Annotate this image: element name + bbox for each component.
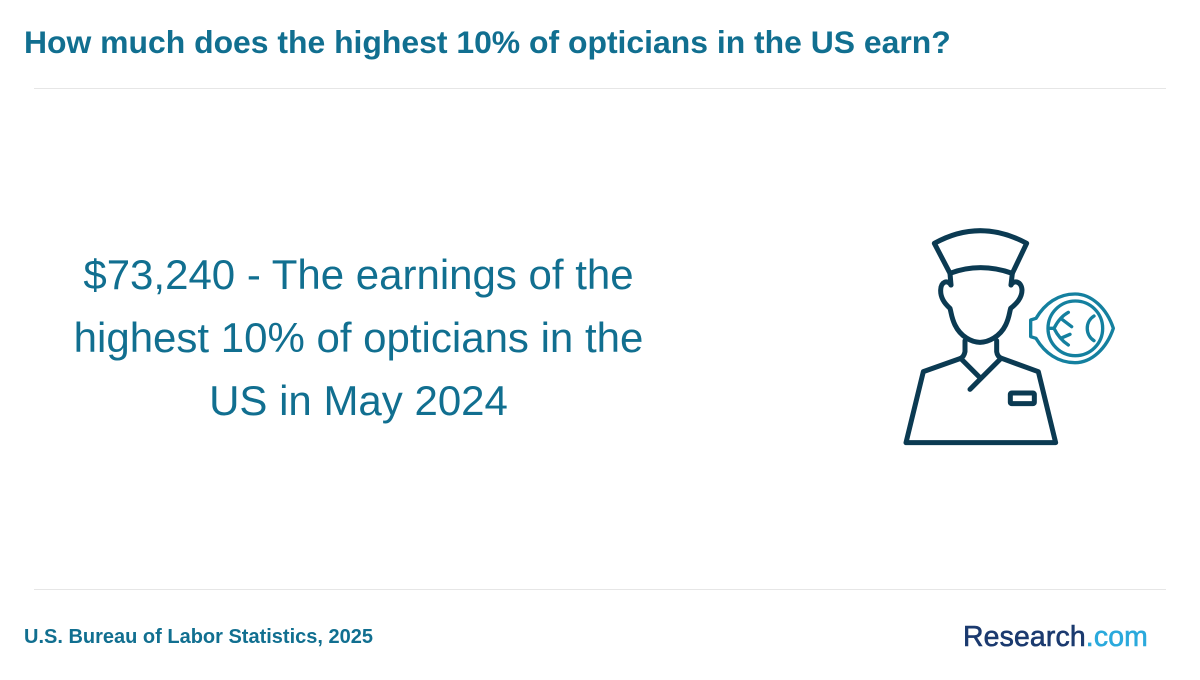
main statistic text — [74, 251, 643, 424]
logo: Research.com — [963, 621, 1148, 653]
main statistic text: highest 10% of opticians in the — [74, 314, 643, 361]
icon: optician with eye — [904, 228, 1115, 446]
main statistic text: US in May 2024 — [209, 377, 508, 424]
title: How much does the highest 10% of opticians in the US earn? — [24, 24, 951, 60]
main statistic text: $73,240 - The earnings of the — [83, 251, 634, 298]
source: U.S. Bureau of Labor Statistics, 2025 — [24, 626, 373, 648]
